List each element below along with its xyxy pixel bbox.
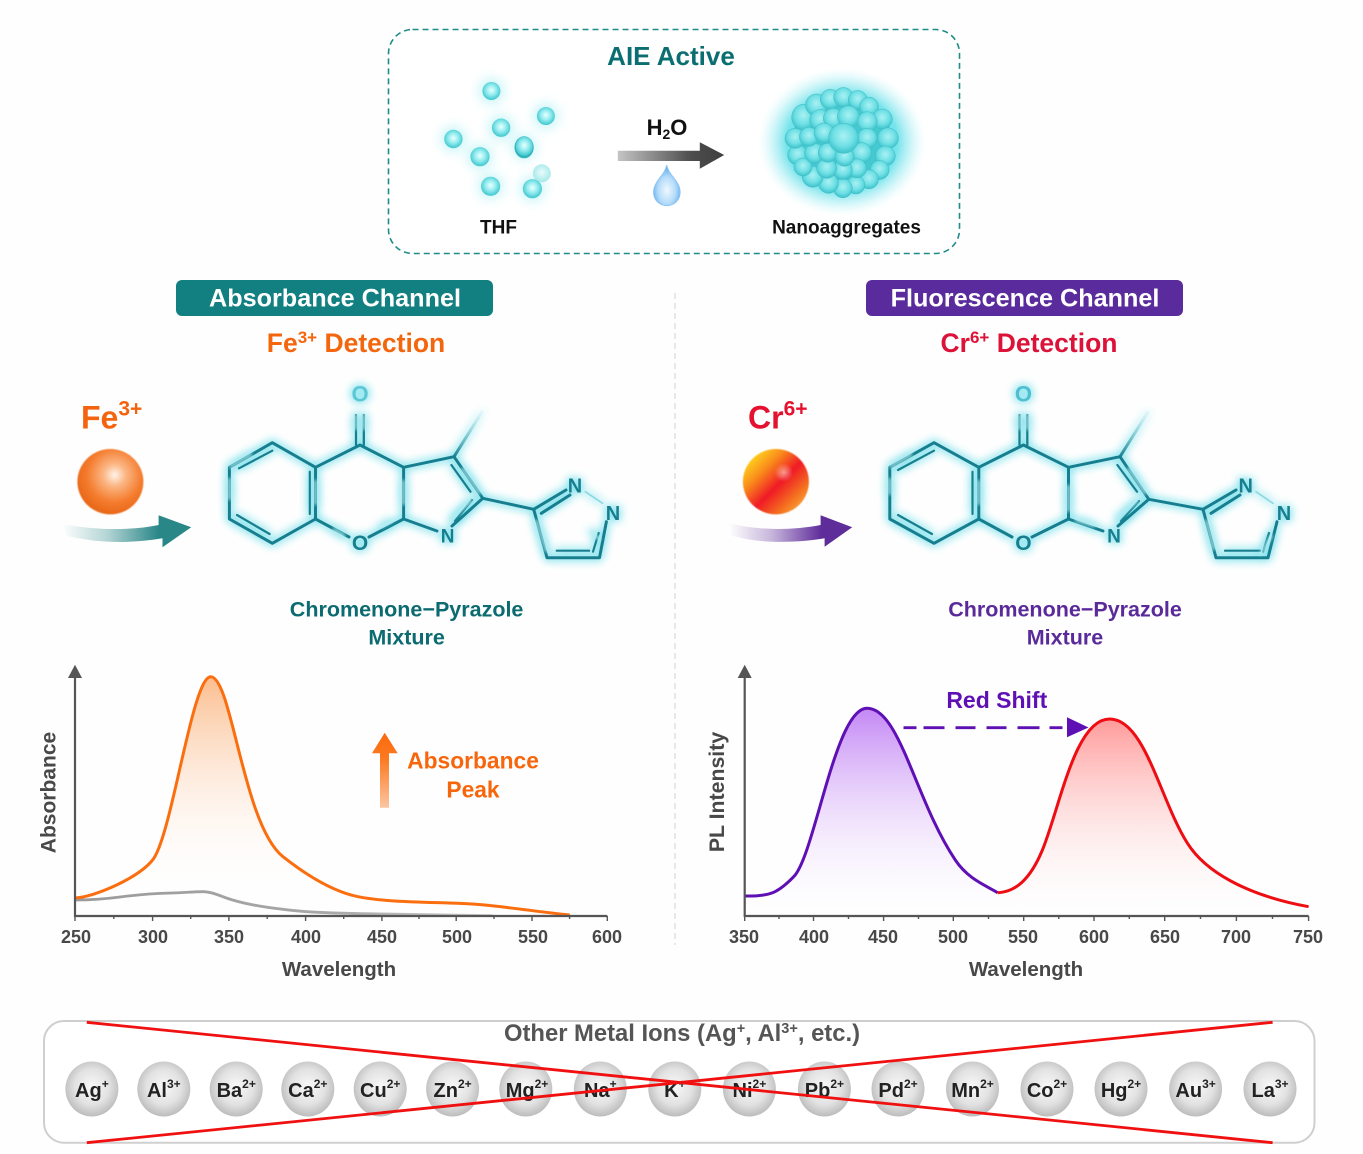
axes [745,672,1309,916]
icon: water drop [654,165,680,206]
x axis tick labels: 350 [729,927,759,947]
x axis title: Wavelength [282,958,396,981]
ion spheres row: Ca [288,1080,314,1102]
ion spheres row: 2+ [753,1077,766,1091]
heading: Fe3+ Detection: Detection [317,328,445,358]
ion spheres row: Au [1175,1080,1202,1102]
ion spheres row: 2+ [1053,1077,1067,1091]
ion spheres row: La [1251,1080,1275,1102]
ion spheres row: 2+ [1127,1077,1141,1091]
ion spheres row: K [664,1080,679,1102]
x axis tick labels: 500 [442,927,472,947]
x axis tick labels: 500 [938,927,968,947]
heading: AIE Active: AIE Active [607,41,735,71]
molecule: chromenone-pyrazole (absorbance): O [351,382,369,406]
ion spheres row: Zn [434,1080,458,1102]
x axis title: Wavelength [969,958,1083,981]
label: Chromenone-Pyrazole Mixture (fluorescence): Chromenone−Pyrazole [948,598,1182,622]
label: Cr6+ ion: Cr [748,400,784,436]
x axis tick labels: 700 [1221,927,1251,947]
x axis tick labels: 450 [367,927,397,947]
ion spheres row: 2+ [242,1077,256,1091]
label: Absorbance Peak: Peak [446,776,500,802]
panel: AIE Active [388,30,960,254]
x axis tick labels: 300 [138,927,168,947]
molecule: chromenone-pyrazole (absorbance): N [441,526,454,548]
icon: nanoaggregate sphere [758,68,926,216]
area under orange curve [75,677,358,916]
y axis title: Absorbance [38,732,60,853]
gray baseline curve [75,892,493,916]
label: H2O: H [647,115,662,140]
ion spheres row: Cu [360,1080,387,1102]
arrow: water addition [618,142,724,169]
heading: Other Metal Ions: Other Metal Ions (Ag [504,1020,737,1047]
red area [998,719,1309,916]
x axis tick labels: 550 [518,927,548,947]
pill: Absorbance Channel [176,280,493,316]
ion spheres row: Mn [951,1080,980,1102]
ion spheres row: 3+ [1275,1077,1289,1091]
axes [75,672,607,916]
ion spheres row: 2+ [980,1077,994,1091]
molecule: chromenone-pyrazole (absorbance): N [568,476,582,498]
orange curve [75,677,570,915]
heading: Cr6+ Detection: Detection [989,328,1117,358]
label: Red Shift: Red Shift [946,687,1048,713]
y axis title: PL Intensity [705,732,729,852]
molecule: chromenone-pyrazole (absorbance): O [352,532,368,555]
ion spheres row [65,1062,1296,1116]
molecule: chromenone-pyrazole (fluorescence): O [1015,382,1032,406]
x axis tick labels: 400 [799,927,829,947]
label: Chromenone-Pyrazole Mixture (absorbance): Chromenone−Pyrazole [290,598,523,622]
heading: Cr6+ Detection: 6+ [970,328,989,347]
label: Absorbance Peak: Absorbance [407,748,539,774]
x axis tick labels: 650 [1150,927,1180,947]
ion spheres row: Pd [878,1080,904,1102]
ion spheres row: 2+ [314,1077,327,1091]
ion spheres row: 3+ [167,1077,181,1091]
label: Cr6+ ion: 6+ [784,398,808,420]
x axis tick labels: 450 [868,927,898,947]
panel: other metal ions [44,1020,1314,1143]
x axis tick labels [61,927,622,947]
chart: absorbance spectrum [38,665,622,981]
molecule: chromenone-pyrazole (fluorescence): N [1277,503,1291,525]
ion spheres row: Al [147,1080,167,1102]
molecule: chromenone-pyrazole (fluorescence): N [1107,526,1121,548]
x axis tick labels [729,927,1323,947]
ion spheres row: 2+ [830,1077,844,1091]
ion spheres row: 2+ [458,1077,472,1091]
arrow: absorbance increase [372,733,398,808]
heading: Cr6+ Detection: Cr [941,328,970,358]
heading: Other Metal Ions: + [737,1021,745,1037]
panel frame [44,1021,1314,1143]
ion spheres row: 2+ [387,1077,400,1091]
label: THF: THF [480,218,517,238]
heading: Other Metal Ions: 3+ [781,1021,798,1037]
ion spheres row: + [679,1077,686,1091]
dashed panel frame [388,30,960,254]
chart: PL spectrum [705,665,1323,981]
icon: Fe3+ sphere [77,449,143,514]
molecule: chromenone-pyrazole (absorbance) [229,382,620,558]
red curve [998,719,1309,907]
ion spheres row: 2+ [904,1077,918,1091]
ion spheres row: 3+ [1202,1077,1216,1091]
ion spheres row: + [102,1077,109,1091]
molecule: chromenone-pyrazole (fluorescence): O [1015,532,1032,555]
x axis tick labels: 750 [1293,927,1323,947]
x axis tick labels: 600 [592,927,622,947]
x axis tick labels: 400 [291,927,321,947]
ion spheres row: Co [1027,1080,1053,1102]
heading: Other Metal Ions: , etc.) [798,1020,860,1047]
pill: Fluorescence Channel [866,280,1183,316]
arrow: Fe3+ to molecule [63,515,191,547]
heading: Other Metal Ions: , Al [745,1020,781,1047]
heading: Fe3+ Detection: Fe [267,328,298,358]
ion spheres row: Ni [733,1080,753,1102]
red cross-out lines [87,1022,1273,1143]
label: H2O: O [670,115,687,140]
label: Nanoaggregates: Nanoaggregates [772,218,921,238]
x axis tick labels: 600 [1079,927,1109,947]
label: Fe3+ ion: 3+ [118,398,142,420]
arrow: red shift dashed [904,717,1088,737]
purple area [745,708,998,916]
label: Chromenone-Pyrazole Mixture (fluorescence): Mixture [1027,626,1103,650]
ion spheres row: Ba [217,1080,242,1102]
label: Chromenone-Pyrazole Mixture (absorbance): Mixture [368,626,445,650]
divider [674,293,676,945]
molecule: chromenone-pyrazole (fluorescence): N [1238,476,1253,498]
ion spheres row: Mg [506,1080,535,1102]
x axis tick labels: 250 [61,927,91,947]
icon: Cr6+ sphere [743,449,809,514]
arrow: Cr6+ to molecule [730,515,852,547]
ion spheres row: Ag [75,1080,102,1102]
pill: Fluorescence Channel: Fluorescence Channel [891,284,1159,312]
molecule: chromenone-pyrazole (fluorescence) [890,382,1291,558]
ion spheres row: + [610,1077,617,1091]
label: Fe3+ ion: Fe [81,400,118,436]
x axis tick labels: 350 [214,927,244,947]
ion spheres row: Pb [805,1080,830,1102]
label: H2O: 2 [662,126,670,142]
icon: dispersed molecules in THF [441,79,558,201]
heading: Fe3+ Detection: 3+ [298,328,317,347]
ion spheres row: Na [584,1080,610,1102]
purple curve [745,708,998,896]
x axis tick labels: 550 [1008,927,1038,947]
molecule: chromenone-pyrazole (absorbance): N [606,503,620,525]
pill: Absorbance Channel: Absorbance Channel [209,284,461,312]
ion spheres row: Hg [1101,1080,1127,1102]
ion spheres row: 2+ [535,1077,548,1091]
